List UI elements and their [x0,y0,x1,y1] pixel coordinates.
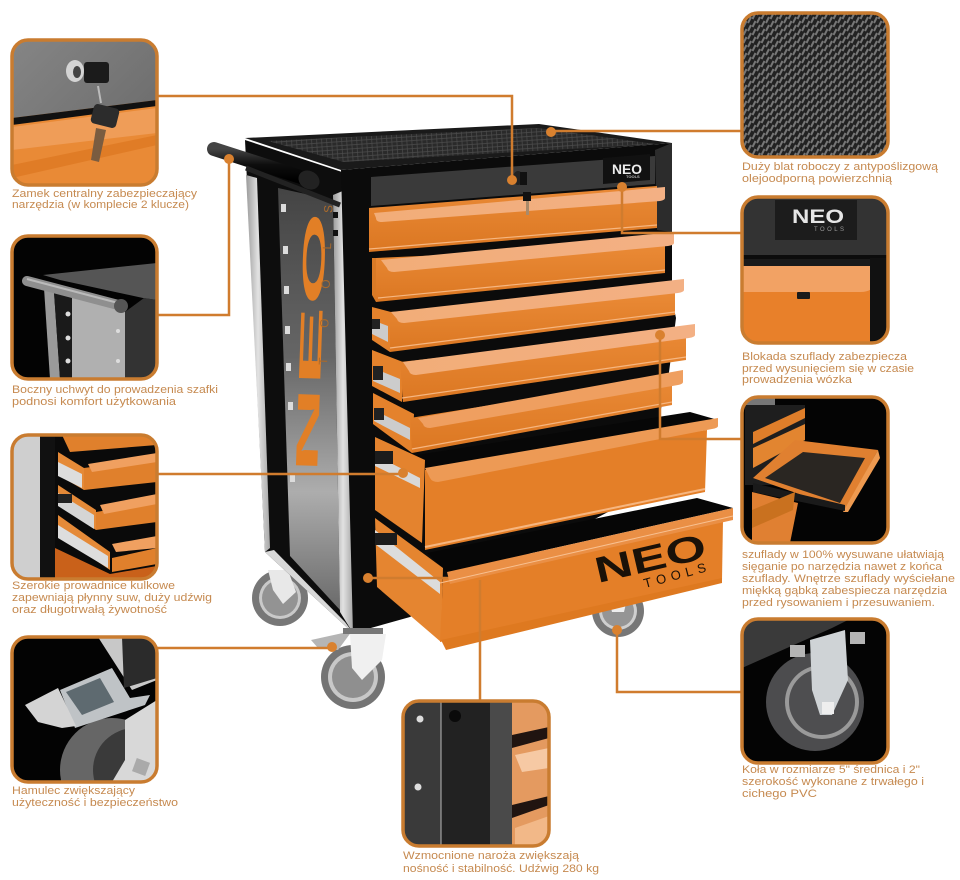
caption: brake [12,785,178,809]
drawer 5 [373,370,683,453]
panel: brake [10,635,159,784]
drawer logo [591,525,710,591]
caption: drawer lock: prowadzenia wózka [742,374,853,386]
caption: full extension drawer: miękką gąbką zabespiecza narzędzia [742,585,948,597]
leader: drawer lock [617,182,742,233]
drawer 6 [375,412,718,550]
caption: drawer lock: przed wysunięciem się w czasie [742,363,914,375]
wheel: rear right [592,585,644,637]
panel: work top texture [742,13,888,157]
side logo: TOOLS [316,205,336,365]
wheel: rear left [252,570,308,626]
side panel [245,140,353,633]
caption: wheel: cichego PVC [742,788,817,800]
drawer 3 [372,279,684,352]
panel: drawer lock [742,197,888,343]
caption: full extension drawer: przed rysowaniem i przesuwaniem. [742,597,935,609]
panel: ball bearing slides [12,435,157,579]
caption: side handle [12,384,218,408]
leader: central lock [157,96,517,185]
tool cabinet illustration [214,124,733,709]
drawer 1 [369,186,665,252]
leader: full extension drawers [655,330,742,439]
drawer 7 [375,498,733,650]
panel: side handle [12,236,157,379]
drawer 4 [372,324,695,402]
side logo: NEO [289,211,333,474]
caption: wheel: Koła w rozmiarze 5" średnica i 2" [742,764,920,776]
caption: side handle: podnosi komfort użytkowania [12,396,177,408]
brand badge [603,154,650,184]
caption: drawer lock [742,351,914,386]
leader: brake [157,642,337,652]
caption: brake: użyteczność i bezpieczeństwo [12,797,178,809]
leader: ball bearing slides [157,468,408,478]
caption: full extension drawer: szuflady w 100% wysuwane ułatwiają [742,549,945,561]
caption: wheel [742,764,924,800]
drawer logo: NEO [591,525,710,591]
caption: full extension drawer: sięganie po narzędzia nawet z końca [742,561,943,573]
cabinet body [245,124,676,633]
leader: wheels [612,625,742,692]
caption: reinforced corners: nośność i stabilność. Udźwig 280 kg [403,863,599,875]
panel: full extension drawer [742,397,888,543]
caption: ball bearing slides: oraz długotrwałą żywotność [12,604,168,616]
caption: ball bearing slides: Szerokie prowadnice kulkowe [12,580,175,592]
panel: reinforced corners [403,701,549,846]
panel: central lock [12,40,157,185]
caption: central lock: narzędzia (w komplecie 2 klucze) [12,199,189,211]
caption: reinforced corners: Wzmocnione naroża zwiększają [403,850,580,862]
leader: work top [546,127,742,137]
panel: drawer lock: NEO [792,207,844,228]
brand badge: NEO [612,161,642,177]
side logo [289,205,336,474]
caption: drawer lock: Blokada szuflady zabezpiecza [742,351,908,363]
caption: brake: Hamulec zwiększający [12,785,136,797]
caption: full extension drawer: szuflady. Wnętrze szuflady wyściełane [742,573,955,585]
caption: work top [742,161,939,185]
caption: work top: olejoodporną powierzchnią [742,173,893,185]
side handle [214,149,340,205]
caption: ball bearing slides [12,580,212,616]
lock and key [513,171,531,215]
caption: ball bearing slides: zapewniają płynny suw, duży udźwig [12,592,212,604]
wheel: front with brake [311,628,386,709]
caption: work top: Duży blat roboczy z antypoślizgową [742,161,939,173]
caption: wheel: szerokość wykonane z trwałego i [742,776,924,788]
leader: side handle [157,154,234,315]
caption: full extension drawer [742,549,955,609]
panel: drawer lock: TOOLS [814,227,844,233]
caption: central lock: Zamek centralny zabezpieczający [12,188,198,200]
brand badge: TOOLS [626,174,640,179]
drawer logo: TOOLS [642,560,708,591]
leader: reinforced corners [363,573,480,701]
caption: reinforced corners [403,850,599,875]
caption: side handle: Boczny uchwyt do prowadzenia szafki [12,384,218,396]
panel: wheel [742,619,888,763]
caption: central lock [12,188,198,211]
drawer 2 [372,232,674,302]
